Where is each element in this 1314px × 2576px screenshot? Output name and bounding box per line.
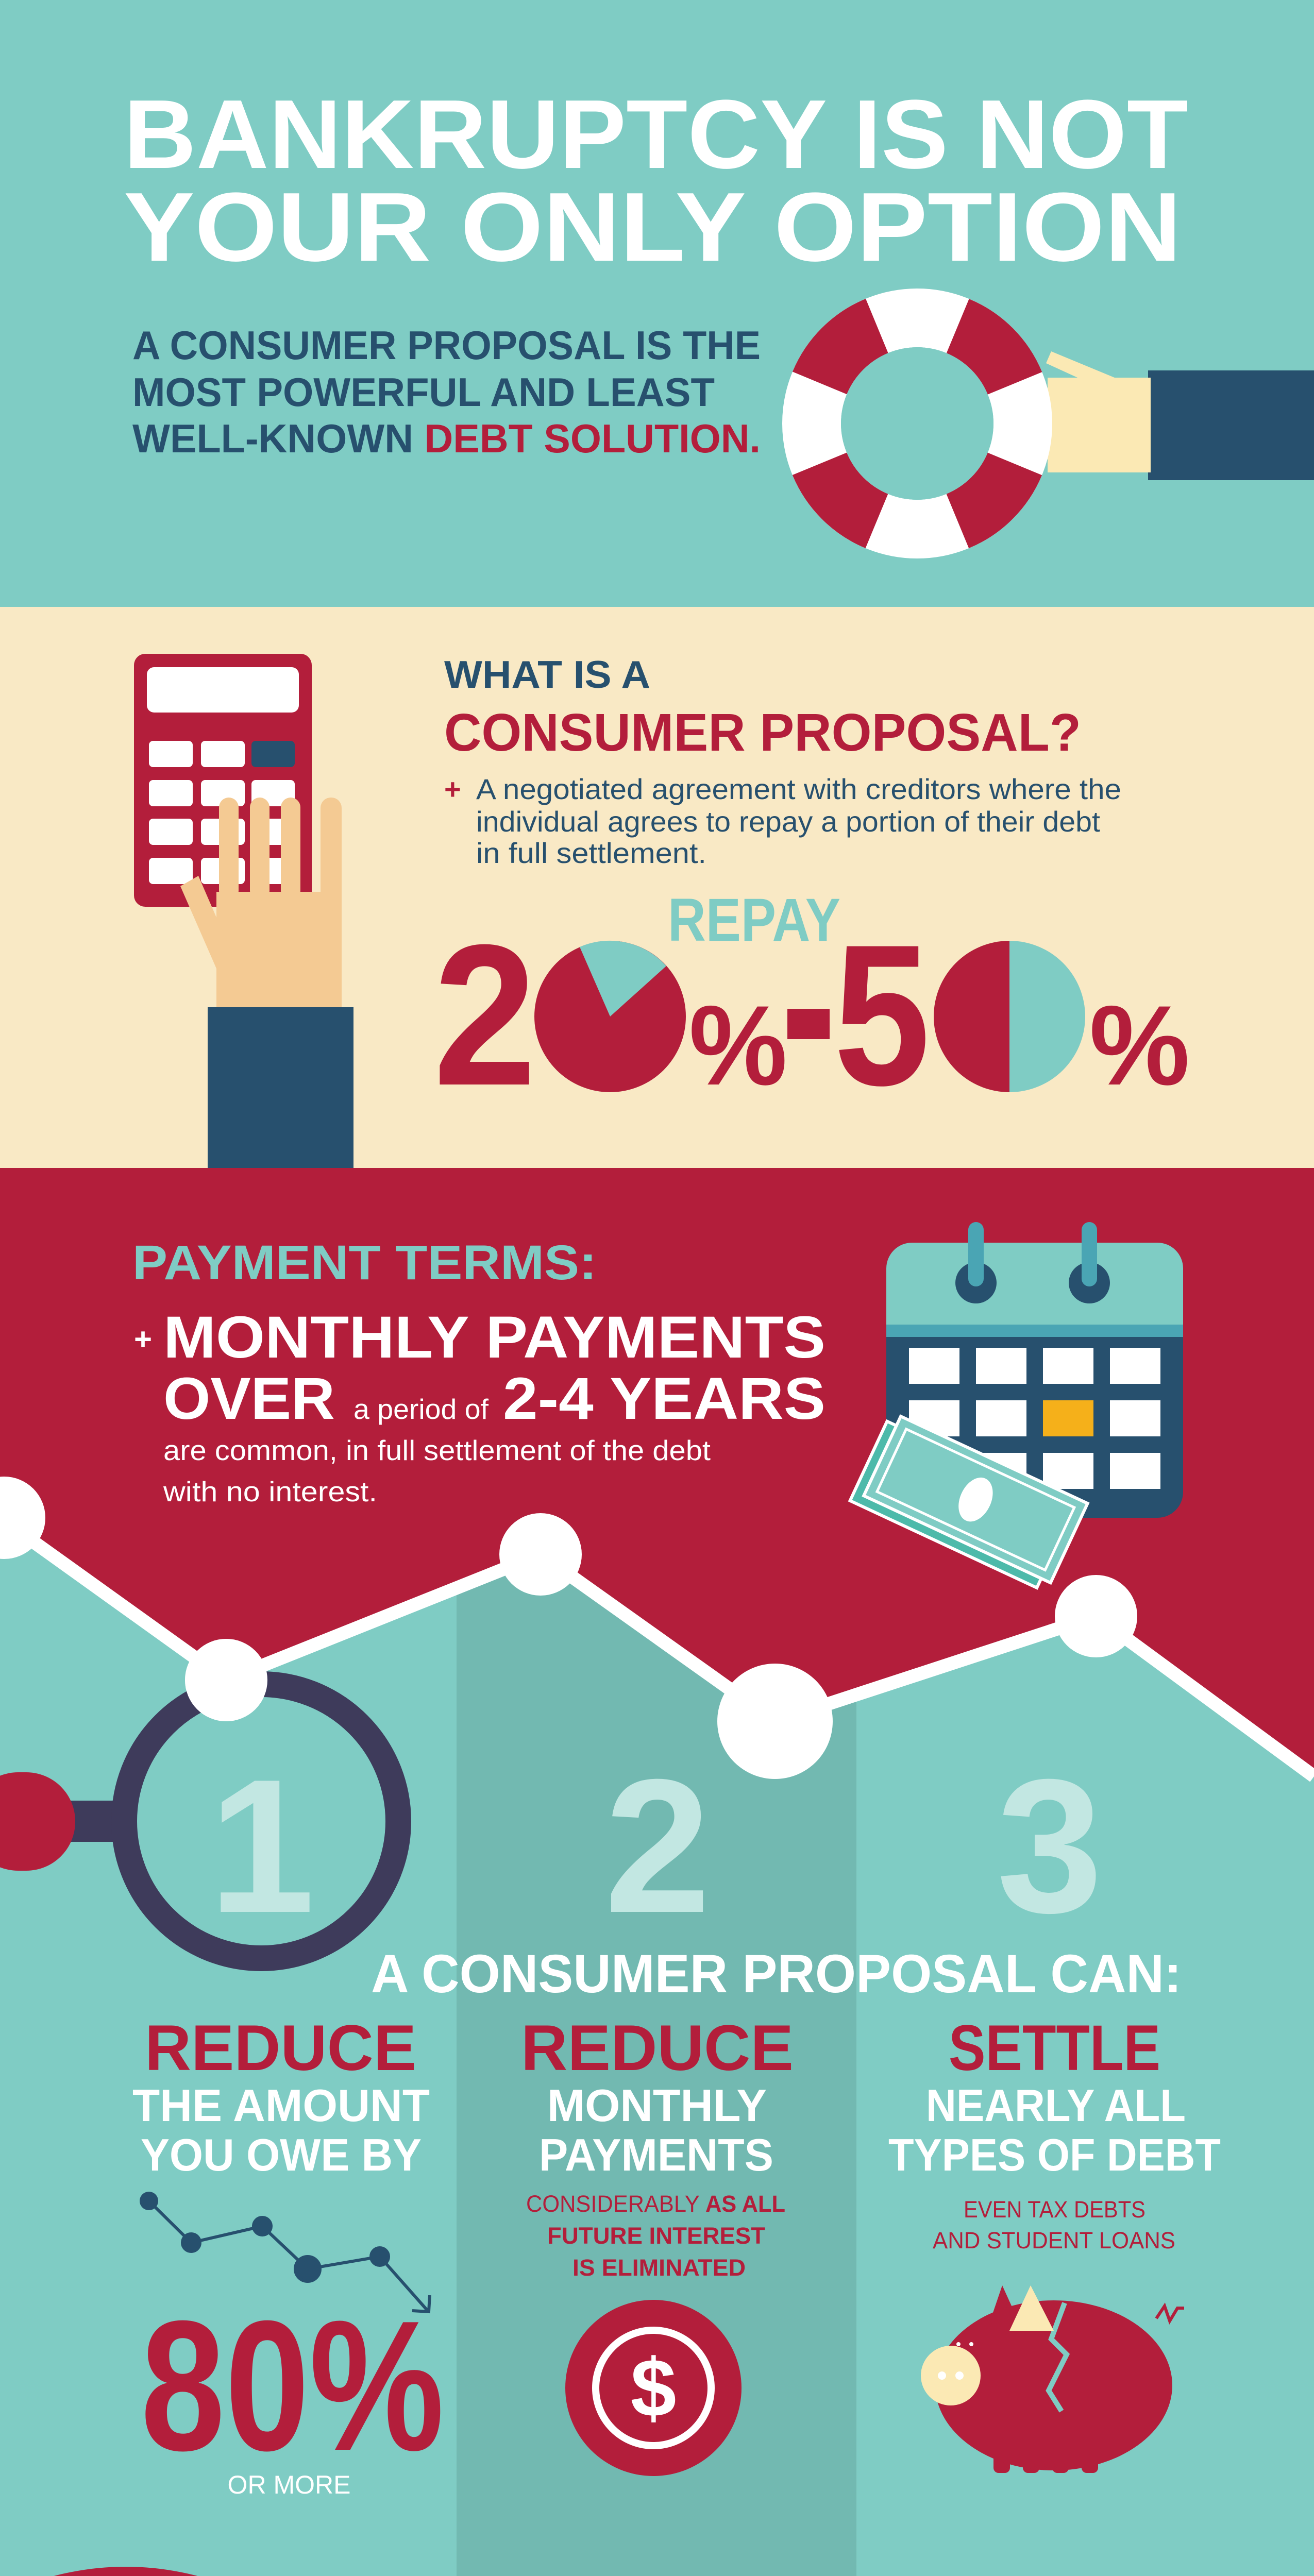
icon: downward line chart [141,2193,430,2312]
chart: repay 20%-50%: % [689,982,787,1109]
title: YOUR ONLY OPTION [124,173,1182,282]
panel: settle debts: EVEN TAX DEBTS [964,2196,1145,2223]
numbers 1 2 3: 1 [209,1740,315,1953]
subtitle [132,323,761,461]
subtitle: MOST POWERFUL AND LEAST [132,369,715,415]
heading: what is a consumer proposal [444,653,1081,762]
subtitle: WELL-KNOWN DEBT SOLUTION. [132,416,761,461]
panel: settle debts: TYPES OF DEBT [888,2129,1221,2180]
panel: reduce amount: 80% [141,2282,444,2489]
chart: repay 20%-50%: 2 [433,903,536,1127]
chart: repay 20%-50% [433,886,1190,1127]
title [124,80,1188,282]
text: monthly payments: 2-4 YEARS [503,1366,826,1432]
icon: magnifying glass [0,1639,398,1958]
panel: settle debts: AND STUDENT LOANS [933,2227,1175,2253]
heading: what is a consumer proposal: WHAT IS A [444,653,650,696]
heading: payment terms: PAYMENT TERMS: [132,1235,597,1290]
subtitle: A CONSUMER PROPOSAL IS THE [132,323,761,368]
chart: repay 20%-50%: % [1089,982,1190,1109]
heading: a consumer proposal can: A CONSUMER PROPOSAL CAN: [371,1944,1182,2004]
panel: reduce monthly payments: CONSIDERABLY AS ALL [526,2191,785,2217]
icon: calculator with hand [134,654,353,1168]
text: monthly payments: with no interest. [163,1476,377,1507]
icon: broken piggy bank [921,2285,1184,2473]
panel: reduce monthly payments [521,2012,794,2476]
title: BANKRUPTCY IS NOT [124,80,1188,189]
text: monthly payments: a period of [353,1393,489,1425]
panel: middle column [457,1554,856,2576]
panel: reduce monthly payments: MONTHLY [547,2080,767,2131]
icon: dollar coin: $ [631,2342,676,2434]
text: monthly payments: OVER [163,1366,335,1432]
text: definition [444,773,1121,869]
text: definition: + [444,773,461,805]
panel: reduce monthly payments: PAYMENTS [539,2129,773,2180]
panel: reduce monthly payments: REDUCE [521,2012,794,2084]
panel: reduce amount: YOU OWE BY [141,2129,422,2180]
panel: reduce monthly payments: FUTURE INTEREST [547,2223,765,2249]
text: monthly payments [134,1304,826,1507]
icon: light bulb with coins [0,2567,446,2576]
panel: reduce monthly payments: IS ELIMINATED [572,2255,746,2281]
text: monthly payments: are common, in full settlement of the debt [163,1434,711,1466]
panel: reduce amount: OR MORE [228,2470,350,2499]
icon: dollar coin [565,2300,742,2476]
text: monthly payments: MONTHLY PAYMENTS [163,1304,826,1370]
panel: reduce amount [132,2012,444,2499]
numbers 1 2 3: 3 [997,1740,1103,1953]
chart: line with points [0,1477,1314,1779]
panel: reduce amount: REDUCE [145,2012,416,2084]
numbers 1 2 3: 2 [604,1740,711,1953]
icon: money bills [850,1412,1088,1592]
panel: settle debts [888,2012,1221,2473]
panel: settle debts: NEARLY ALL [926,2080,1186,2131]
text: definition: individual agrees to repay a portion of their debt [476,805,1100,838]
section: intro background [0,0,1314,607]
text: monthly payments: + [134,1322,152,1357]
panel: reduce amount: THE AMOUNT [132,2080,430,2131]
icon: hand holding life ring [812,318,1314,529]
text: definition: A negotiated agreement with creditors where the [476,773,1121,805]
panel: settle debts: SETTLE [949,2012,1160,2084]
icon: calendar [886,1222,1183,1518]
background: teal chart area [0,1518,1314,2576]
text: definition: in full settlement. [476,837,706,869]
chart: repay 20%-50%: 5 [834,903,930,1127]
heading: what is a consumer proposal: CONSUMER PROPOSAL? [444,703,1081,762]
section: payment terms background [0,1168,1314,1838]
section: what is a consumer proposal background [0,607,1314,1168]
chart: repay 20%-50%: REPAY [668,886,840,954]
numbers 1 2 3 [209,1740,1103,1953]
